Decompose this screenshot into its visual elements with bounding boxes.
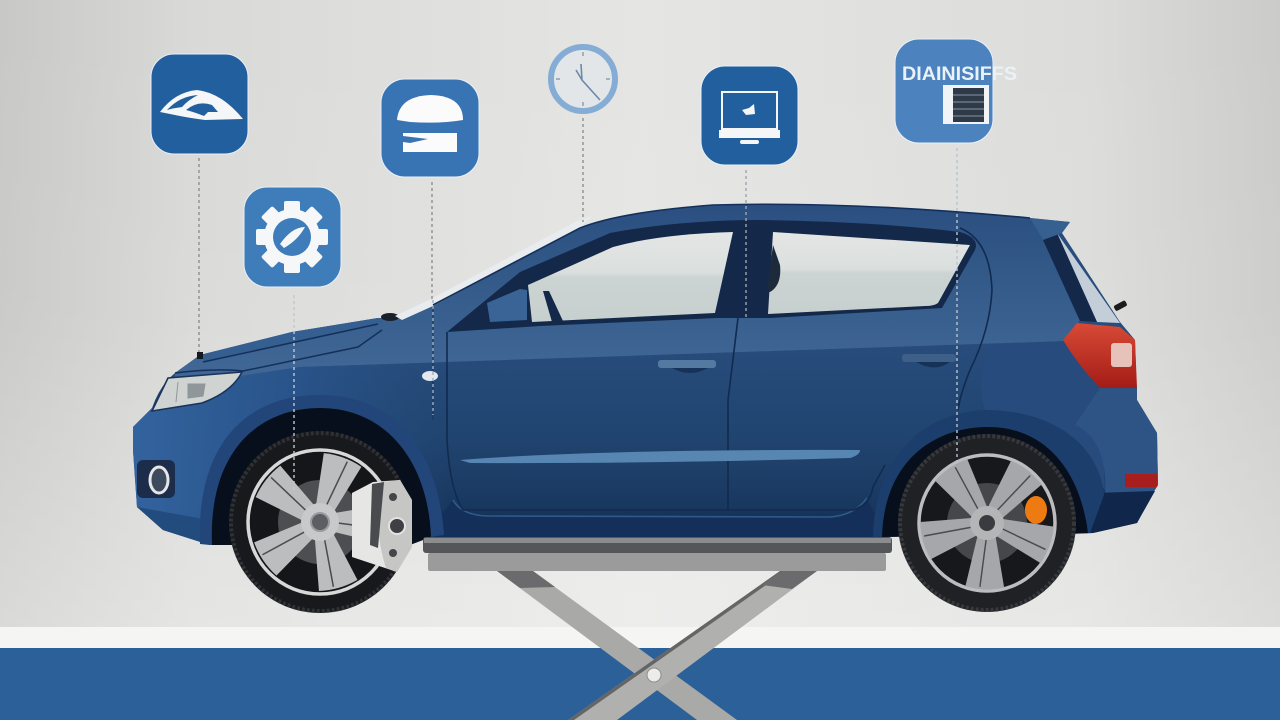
fog lamp <box>137 460 175 498</box>
rear glass <box>1057 233 1120 323</box>
rear bumper panel <box>1075 388 1158 495</box>
car <box>133 204 1158 545</box>
rear wheel arch <box>882 427 1088 537</box>
brake disc <box>947 483 1027 563</box>
upper body band <box>175 204 1080 388</box>
sill <box>425 498 885 537</box>
blue base band <box>0 648 1280 720</box>
roof edge <box>433 204 1030 305</box>
rear wheel <box>892 429 1081 616</box>
icon: clock <box>551 47 615 111</box>
front badge <box>422 371 438 381</box>
door handle rear <box>902 354 956 368</box>
front bumper lower <box>137 507 220 545</box>
hub <box>979 515 995 531</box>
front arch lip <box>200 395 444 545</box>
brake caliper module <box>352 480 412 572</box>
icon: diagnostics badge <box>895 39 1017 143</box>
rim <box>248 450 392 594</box>
upper rail <box>423 537 892 553</box>
orange brake light <box>1025 496 1047 524</box>
connector lines <box>199 118 957 490</box>
badge label: DIAINISIFFS <box>902 64 1017 85</box>
rear bumper shadow <box>1070 491 1155 534</box>
hood lip <box>200 318 382 362</box>
tyre <box>898 434 1076 612</box>
front window <box>528 232 733 322</box>
tail light <box>1063 323 1137 388</box>
lift arm: left to right descending <box>497 571 737 720</box>
rear quarter lower <box>981 341 1105 490</box>
hub <box>311 513 329 531</box>
mirror arm <box>543 291 563 322</box>
hood end marker <box>197 352 203 359</box>
rim <box>919 455 1055 591</box>
front wheel arch <box>212 408 431 545</box>
headrest <box>767 245 780 292</box>
rear wiper <box>1113 300 1128 311</box>
icon: gear badge <box>244 187 341 287</box>
brake disc <box>278 480 362 564</box>
white stripe <box>0 627 1280 648</box>
rear reflector <box>1125 474 1157 487</box>
rear arch lip <box>873 410 1104 537</box>
icon: laptop badge <box>701 66 798 165</box>
scissor lift <box>497 571 817 720</box>
lower rail <box>428 553 886 571</box>
icon: burger badge <box>381 79 479 177</box>
vent unit <box>943 85 989 124</box>
side mirror <box>487 289 527 322</box>
car body <box>133 204 1158 545</box>
fender seam <box>432 306 434 420</box>
rear window <box>768 232 970 314</box>
lift platform <box>423 537 892 571</box>
gear <box>256 201 328 273</box>
tyre <box>229 431 411 613</box>
icon: wave badge <box>151 54 248 154</box>
front fender panel <box>133 362 447 545</box>
wiper nub <box>381 313 399 321</box>
door handle front <box>658 360 716 373</box>
front wheel <box>229 431 411 613</box>
rear spoiler <box>1030 218 1070 240</box>
body side moulding <box>460 450 860 463</box>
window frame <box>447 220 976 332</box>
lift arm: right to left descending <box>568 571 817 720</box>
headlight <box>152 372 242 411</box>
lift pivot <box>647 668 661 682</box>
door shut lines <box>447 228 992 510</box>
windshield highlight <box>395 216 592 320</box>
tail light lens <box>1111 343 1132 367</box>
